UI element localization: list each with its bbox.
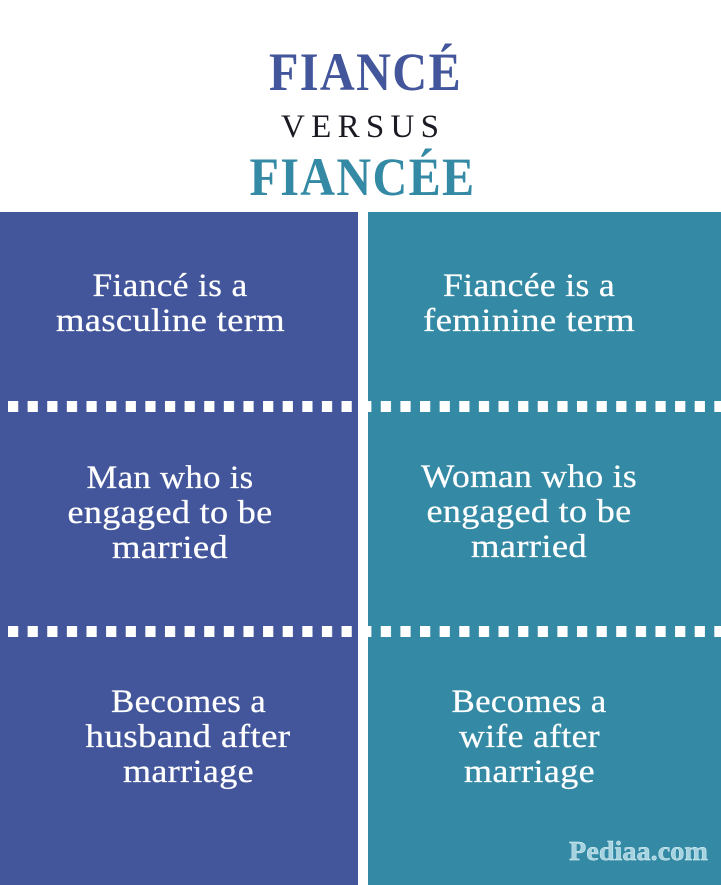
heading: versus: VERSUS xyxy=(281,109,439,145)
text: feminine term: feminine term xyxy=(423,303,635,339)
text: woman engaged: engaged to be xyxy=(426,494,632,530)
text: becomes wife xyxy=(452,684,607,790)
panel: fiancé column xyxy=(0,212,358,885)
title: Fiancé: FIANCÉ xyxy=(269,42,462,102)
column gap xyxy=(358,212,368,885)
logo: Pediaa.com: Pediaa.com xyxy=(569,836,709,866)
text: feminine term: Fiancée is a xyxy=(443,268,615,304)
dotted divider: second row xyxy=(0,626,721,637)
text: man engaged: Man who is xyxy=(86,460,254,496)
text: becomes husband: marriage xyxy=(123,754,254,790)
text: becomes husband xyxy=(86,684,290,790)
text: woman engaged: Woman who is xyxy=(421,459,637,495)
text: masculine term xyxy=(56,268,285,339)
text: becomes wife: marriage xyxy=(464,754,595,790)
text: woman engaged xyxy=(421,459,637,565)
text: woman engaged: married xyxy=(471,529,587,565)
title: Fiancée: FIANCÉE xyxy=(250,147,476,207)
text: masculine term: Fiancé is a xyxy=(92,268,248,304)
text: becomes wife: wife after xyxy=(459,719,600,755)
dotted divider: first row xyxy=(0,401,721,412)
text: man engaged xyxy=(68,460,272,566)
text: becomes husband: Becomes a xyxy=(111,684,266,720)
text: becomes wife: Becomes a xyxy=(452,684,607,720)
text: masculine term: masculine term xyxy=(56,303,285,339)
panel: fiancée column xyxy=(368,212,721,885)
text: man engaged: married xyxy=(112,530,228,566)
text: man engaged: engaged to be xyxy=(68,495,272,531)
text: feminine term xyxy=(423,268,635,339)
text: becomes husband: husband after xyxy=(86,719,290,755)
